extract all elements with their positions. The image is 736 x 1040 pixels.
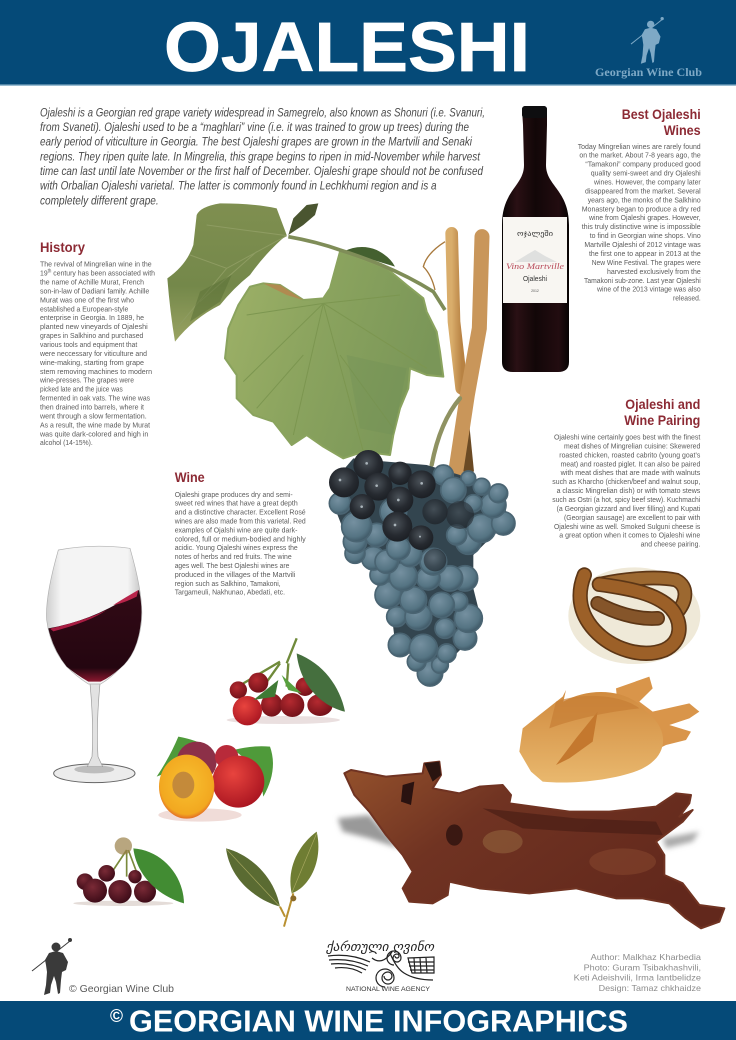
heading: History xyxy=(40,239,85,255)
illustration: wine glass and fruit xyxy=(46,546,345,927)
body text: on the market. About 7-8 years ago, the xyxy=(579,151,701,160)
body text: wine of the 2013 vintage was also xyxy=(596,285,701,294)
body text: released. xyxy=(673,294,701,303)
bottle label text: 2012 xyxy=(531,289,539,293)
body text: (a Georgian gizzard and liver filling) and Kupati xyxy=(557,504,701,513)
body text: examples of Ojalshi wine are quite dark- xyxy=(175,525,298,534)
body text: such as Kharcho (chicken/beef and walnut soup, xyxy=(552,477,700,486)
footer logo: Georgian Wine Club xyxy=(32,938,174,995)
body text: with meat dishes that are made with walnuts xyxy=(560,468,700,477)
body text: sweet red wines that have a great depth xyxy=(175,499,298,508)
body text: disappeared from the market. Several xyxy=(585,186,701,196)
body text: stem removing machines to modern xyxy=(40,367,152,376)
credits: Design: Tamaz chkhaidze xyxy=(599,983,701,993)
dark grapes xyxy=(329,450,474,571)
body text: was quite dark-colored and high in xyxy=(39,429,148,438)
body text: a great option when it comes to Ojaleshi wine xyxy=(559,531,700,540)
intro text block: Ojaleshi is a Georgian red grape variety widespread in Samegrelo, also known as Shonuri (i.e. Svanuri, xyxy=(40,106,485,120)
credits: Photo: Guram Tsibakhashvili, xyxy=(584,962,701,972)
National Wine Agency logo xyxy=(325,940,435,993)
body text: Today Mingrelian wines are rarely found xyxy=(578,142,701,151)
intro text block: completely different grape. xyxy=(40,194,159,207)
heading: Wine Pairing xyxy=(624,412,700,428)
body text: quality semi-sweet and dry Ojaleshi xyxy=(591,169,701,178)
body text xyxy=(578,142,701,303)
body text: century has been associated with xyxy=(51,268,155,278)
footer title: GEORGIAN WINE INFOGRAPHICS xyxy=(129,1004,628,1038)
body text: son-in-law of Dadiani family. Achille xyxy=(40,286,149,295)
canes xyxy=(432,233,482,472)
heading: Ojaleshi and xyxy=(625,396,700,412)
body text: produced in the villages of the Martvili xyxy=(175,570,296,579)
main leaf xyxy=(225,252,443,458)
icon: Georgian Wine Club figure xyxy=(631,17,664,64)
intro text block xyxy=(40,106,485,207)
body text: th xyxy=(48,268,52,274)
bottle label text: Vino Martville xyxy=(506,262,565,271)
roast chicken xyxy=(519,677,699,783)
body text: The revival of Mingrelian wine in the xyxy=(40,260,152,269)
body text: and a distinctive character. Excellent Rosé xyxy=(175,508,306,517)
body text: ages well. The best Ojaleshi wines are xyxy=(175,561,289,570)
body text: roasted chicken, roasted cabrito (young goat’s xyxy=(559,450,700,459)
body text: and cheese pairing. xyxy=(641,540,700,549)
Georgian script wordmark: ქართული ღვინო xyxy=(325,940,435,955)
plums xyxy=(157,737,273,822)
body text: various tools and equipment that xyxy=(40,340,138,349)
body text: were neccessary for viticulture and xyxy=(39,349,147,358)
body text: Ojaleshi wine as well. Smoked Sulguni cheese is xyxy=(554,522,700,531)
body text: Ojaleshi wine certainly goes best with the finest xyxy=(554,432,701,442)
body text: wine-making, starting from grape xyxy=(39,358,144,367)
copyright mark: © xyxy=(110,1006,123,1026)
body text: acidic. Young Ojaleshi wines express the xyxy=(175,543,298,552)
sausage on plate xyxy=(568,567,700,664)
body text: meat dishes of Mingrelian cuisine: Skewered xyxy=(564,441,700,450)
body text xyxy=(174,490,306,597)
Wine panel xyxy=(174,469,306,597)
small leaf xyxy=(288,203,318,235)
body text: New Wine Festival. The grapes were xyxy=(592,258,701,267)
body text: “Tamakoni” company produced good xyxy=(585,160,701,169)
body text: the name of Achille Murat, French xyxy=(40,278,144,286)
heading: Wine xyxy=(175,469,205,485)
body text xyxy=(39,260,155,447)
back leaf xyxy=(343,247,395,267)
body text: fermented in oak vats. The wine was xyxy=(40,394,150,403)
body text xyxy=(552,432,701,549)
heading: Wines xyxy=(664,122,701,138)
intro text block: from Svaneti). Ojaleshi used to be a “maghlari” vine (i.e. it was trained to grow up trees) during the xyxy=(40,121,469,134)
body text: Martville Ojaleshi of 2012 vintage was xyxy=(584,240,701,249)
body text: 19 xyxy=(40,268,49,278)
body text: notes of herbs and red fruits. The wine xyxy=(175,552,292,561)
body text: established a European-style xyxy=(40,304,128,313)
vine ornament xyxy=(328,951,434,987)
body text: such as Ostri (a hot, spicy beef stew). Kuchmachi xyxy=(552,495,701,504)
heading: Best Ojaleshi xyxy=(622,106,701,122)
credits: Author: Malkhaz Kharbedia xyxy=(591,952,701,962)
wine glass xyxy=(46,546,142,783)
body text: wines are also made from this varietal. Red xyxy=(174,516,306,526)
body text: a classic Mingrelian dish) or with tomato stews xyxy=(557,486,700,495)
heading xyxy=(624,396,700,428)
roast piglet xyxy=(338,762,724,928)
intro text block: regions. They ripen quite late. In Mingrelia, this grape begins to ripen in mid-November while harvest xyxy=(40,150,481,163)
illustration: food xyxy=(338,567,724,928)
body text: planted new vineyards of Ojaleshi xyxy=(40,322,148,331)
intro text block: with Orbalian Ojaleshi varietal. The latter is commonly found in Lechkhumi region and is a xyxy=(40,180,437,193)
body text: wines. However, the company later xyxy=(593,178,701,186)
body text: (Georgian sausage) are excellent to pair with xyxy=(564,513,700,522)
bay leaves xyxy=(226,832,318,927)
header band xyxy=(0,0,736,86)
bottle label text: ოჯალეში xyxy=(517,230,553,238)
intro text block: early period of viticulture in Georgia. The best Ojaleshi grapes are grown in the Martvili and Senaki xyxy=(40,136,472,149)
credits xyxy=(574,952,701,993)
body text: then drained into barrels, where it xyxy=(40,402,145,412)
footer band xyxy=(0,1001,736,1040)
body text: this truly distinctive wine is impossible xyxy=(582,222,701,231)
heading xyxy=(622,106,701,138)
body text: meat) and roasted piglet. It can also be paired xyxy=(561,459,700,468)
stem xyxy=(288,237,445,310)
icon: figure silhouette xyxy=(32,938,72,995)
body text: years ago, the monks of the Salkhino xyxy=(588,195,701,204)
body text: alcohol (14-15%). xyxy=(40,438,93,447)
body text: wine from Ojaleshi grapes. However, xyxy=(588,213,701,222)
body text: As a result, the wine made by Murat xyxy=(40,420,151,429)
grape cluster xyxy=(329,450,515,686)
body text: the first one to appear in 2013 at the xyxy=(589,249,701,258)
title: OJALESHI xyxy=(164,8,530,86)
body text: Tamakoni sub-zone. Last year Ojaleshi xyxy=(584,276,701,285)
Ojaleshi and Wine Pairing panel xyxy=(552,396,701,549)
logo caption: © Georgian Wine Club xyxy=(69,983,174,995)
upper left leaf xyxy=(167,203,287,342)
body text: picked late and the juice was xyxy=(40,385,123,394)
body text: enterprise in Georgia. In 1889, he xyxy=(40,313,144,322)
wine bottle xyxy=(502,106,569,372)
caption: NATIONAL WINE AGENCY xyxy=(346,986,431,993)
body text: wine-presses. The grapes were xyxy=(39,376,134,385)
logo text: Georgian Wine Club xyxy=(595,65,702,79)
red cherries xyxy=(227,638,345,725)
body text: to find in Georgian wine shops. Vino xyxy=(590,231,701,240)
credits: Keti Adeishvili, Irma Iantbelidze xyxy=(574,972,701,982)
History panel xyxy=(39,239,155,447)
body text: Monastery began to produce a dry red xyxy=(582,204,701,213)
body text: Ojaleshi grape produces dry and semi- xyxy=(175,490,293,499)
bottle label text xyxy=(506,230,565,293)
illustration: vine leaves, canes and grape cluster xyxy=(167,203,515,686)
dark cherries xyxy=(73,837,184,906)
bottle label text: Ojaleshi xyxy=(523,276,547,283)
intro text block: time can last until late November or the first half of December. Ojaleshi grape should not be confused xyxy=(40,165,483,178)
body text: region such as Salkhino, Tamakoni, xyxy=(175,579,281,588)
tendril xyxy=(423,242,445,290)
body text: Murat was one of the first who xyxy=(40,295,134,304)
body text: went through a slow fermentation. xyxy=(39,411,147,420)
body text: harvested exclusively from the xyxy=(607,267,701,276)
body text: colored, full or medium-bodied and highly xyxy=(175,534,306,543)
body text: grapes in Salkhino and purchased xyxy=(40,331,143,340)
Best Ojaleshi Wines panel xyxy=(578,106,701,303)
body text: Targameuli, Nakhunao, Abedati, etc. xyxy=(175,588,285,597)
